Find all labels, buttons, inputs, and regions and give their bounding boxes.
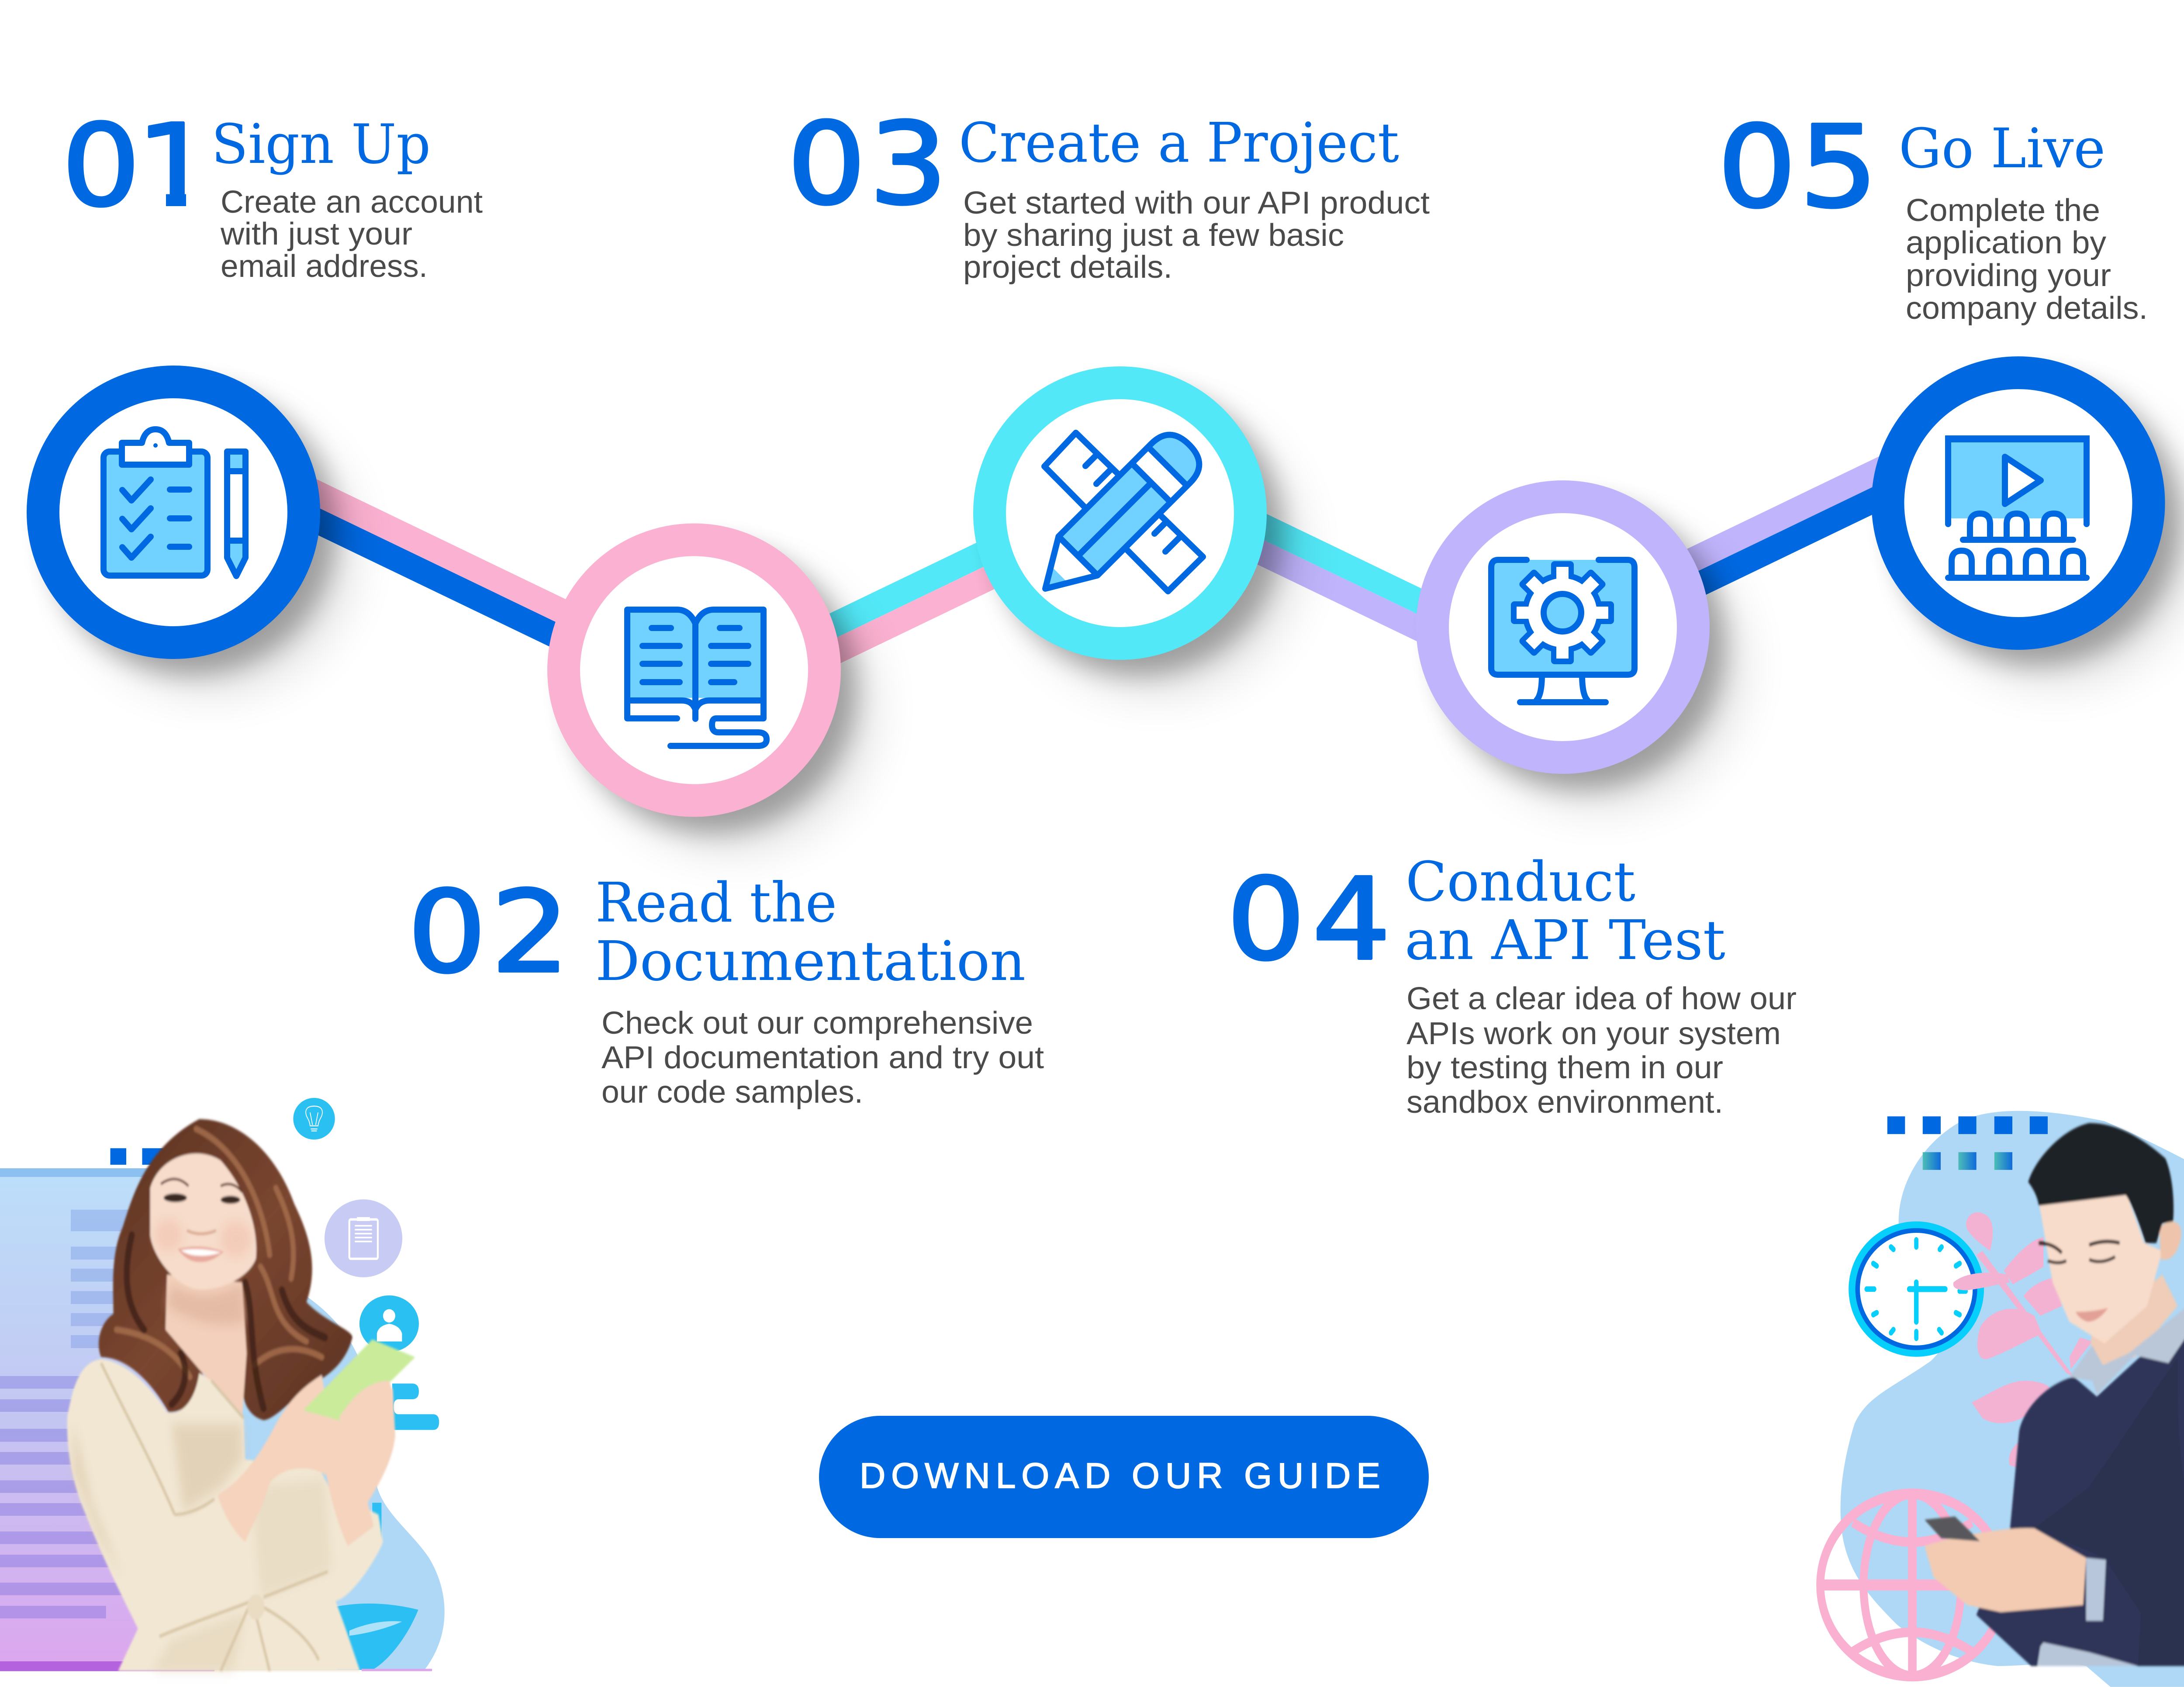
heading: Read the Documentation: Documentation (595, 930, 1026, 993)
heading: Conduct an API Test (1405, 850, 1725, 972)
icon: ruler (1044, 433, 1203, 591)
icon: person bubble (359, 1295, 419, 1352)
number 03: 03 (787, 98, 948, 230)
facial features (2039, 1242, 2120, 1322)
description: Get started with our API product (963, 186, 1430, 221)
description: by sharing just a few basic (963, 218, 1344, 253)
heading: Conduct an API Test: an API Test (1405, 909, 1725, 972)
heading: Read the Documentation: Read the (595, 871, 837, 935)
light blue blob (1841, 1111, 2184, 1687)
cyan leaf (334, 1503, 432, 1671)
illustration: woman with phone (0, 1098, 445, 1671)
connector: step 1 to step 2 (218, 432, 612, 676)
sweater (1977, 1322, 2184, 1666)
hair (99, 1119, 352, 1420)
description (1406, 981, 1797, 1120)
description (601, 1006, 1044, 1110)
icon: clipboard bubble (325, 1199, 402, 1277)
description: API documentation and try out (601, 1040, 1044, 1075)
description: Check out our comprehensive (601, 1006, 1033, 1041)
phone (1925, 1517, 1980, 1541)
description: Get a clear idea of how our (1406, 981, 1797, 1016)
number 01: 01 (62, 100, 215, 231)
description: Create an account (221, 185, 483, 220)
icon: video screen (1945, 439, 2090, 524)
description: providing your (1906, 258, 2111, 293)
number 04: 04 (1227, 854, 1391, 985)
icon: clipboard (104, 429, 207, 576)
step 2 text (408, 866, 1044, 1110)
description: APIs work on your system (1406, 1016, 1781, 1051)
face (2039, 1192, 2162, 1343)
icon: seats (1948, 514, 2087, 578)
ear (2159, 1221, 2181, 1260)
light blue blob (214, 1296, 445, 1670)
cuff (2086, 1558, 2106, 1621)
icon: book (627, 610, 767, 746)
hair highlights (117, 1129, 322, 1377)
description: application by (1906, 225, 2106, 260)
description: sandbox environment. (1406, 1085, 1723, 1120)
heading: Go Live: Go Live (1899, 117, 2105, 180)
arms and hands (218, 1375, 395, 1546)
description: by testing them in our (1406, 1050, 1723, 1085)
face (150, 1153, 256, 1290)
dress (67, 1359, 383, 1671)
icon: pencil (227, 452, 245, 576)
heading: Conduct an API Test: Conduct (1406, 850, 1635, 914)
icon: monitor (1491, 560, 1635, 702)
facial features (161, 1179, 242, 1262)
description: email address. (221, 249, 428, 284)
step 1 ring icon: clipboard and pencil (43, 382, 304, 643)
description (963, 186, 1430, 285)
step 2 ring icon: open book (563, 540, 825, 800)
shirt hem (2037, 1642, 2138, 1666)
phone (303, 1339, 415, 1422)
step 1 text (68, 120, 482, 277)
step 4 text (1227, 850, 1797, 1120)
panel: gradient document (0, 1168, 214, 1671)
description: Complete the (1906, 193, 2100, 228)
cyan dash bars (392, 1383, 439, 1430)
description: project details. (963, 250, 1172, 285)
step 5 text (1717, 101, 2148, 326)
icon: crossing pencil (1026, 425, 1209, 608)
hair (2028, 1123, 2174, 1243)
description: with just your (220, 217, 412, 252)
circle shadows (46, 376, 2184, 847)
connector: step 3 to step 4 (1179, 472, 1485, 674)
number 05: 05 (1717, 101, 1878, 233)
description: company details. (1906, 291, 2148, 326)
button: download our guide: DOWNLOAD OUR GUIDE (860, 1456, 1380, 1496)
icon: globe (1820, 1494, 2004, 1676)
man figure (1925, 1123, 2184, 1666)
neck (166, 1275, 247, 1418)
step 5 ring icon: video screen and seats (1888, 373, 2149, 633)
pink plant (1953, 1212, 2092, 1470)
step 4 ring icon: monitor with gear (1433, 497, 1693, 757)
neck shadow (167, 1283, 245, 1325)
blue squares (1887, 1116, 2048, 1170)
fingers (339, 1381, 392, 1425)
woman figure (67, 1119, 415, 1671)
connector: step 4 to step 5 (1616, 415, 1966, 638)
blue squares (111, 1148, 164, 1165)
number 02: 02 (408, 866, 570, 998)
icon: clock (1849, 1221, 1984, 1357)
cheek blush (155, 1219, 251, 1257)
heading: Read the Documentation (595, 871, 1026, 993)
neck (2089, 1275, 2177, 1377)
description (220, 185, 483, 284)
hands (1925, 1528, 2086, 1612)
shirt collar (2070, 1304, 2184, 1394)
icon: gear (1511, 561, 1614, 664)
heading: Sign Up: Sign Up (211, 113, 431, 176)
step 3 ring icon: ruler and pencil (990, 383, 1250, 644)
description: our code samples. (601, 1075, 863, 1110)
heading: Create a Project: Create a Project (959, 111, 1399, 175)
step 3 text (787, 98, 1430, 285)
sweater shading (2034, 1357, 2184, 1666)
belt knot (247, 1594, 264, 1620)
hair dark strands (127, 1235, 325, 1408)
illustration: man with phone (1820, 1111, 2184, 1687)
dress shading (73, 1424, 331, 1671)
description (1906, 193, 2148, 326)
dress folds and belt (101, 1363, 328, 1671)
connector: step 2 to step 3 (786, 508, 1048, 689)
icon: light bulb (293, 1098, 335, 1139)
button: download our guide (819, 1416, 1429, 1538)
